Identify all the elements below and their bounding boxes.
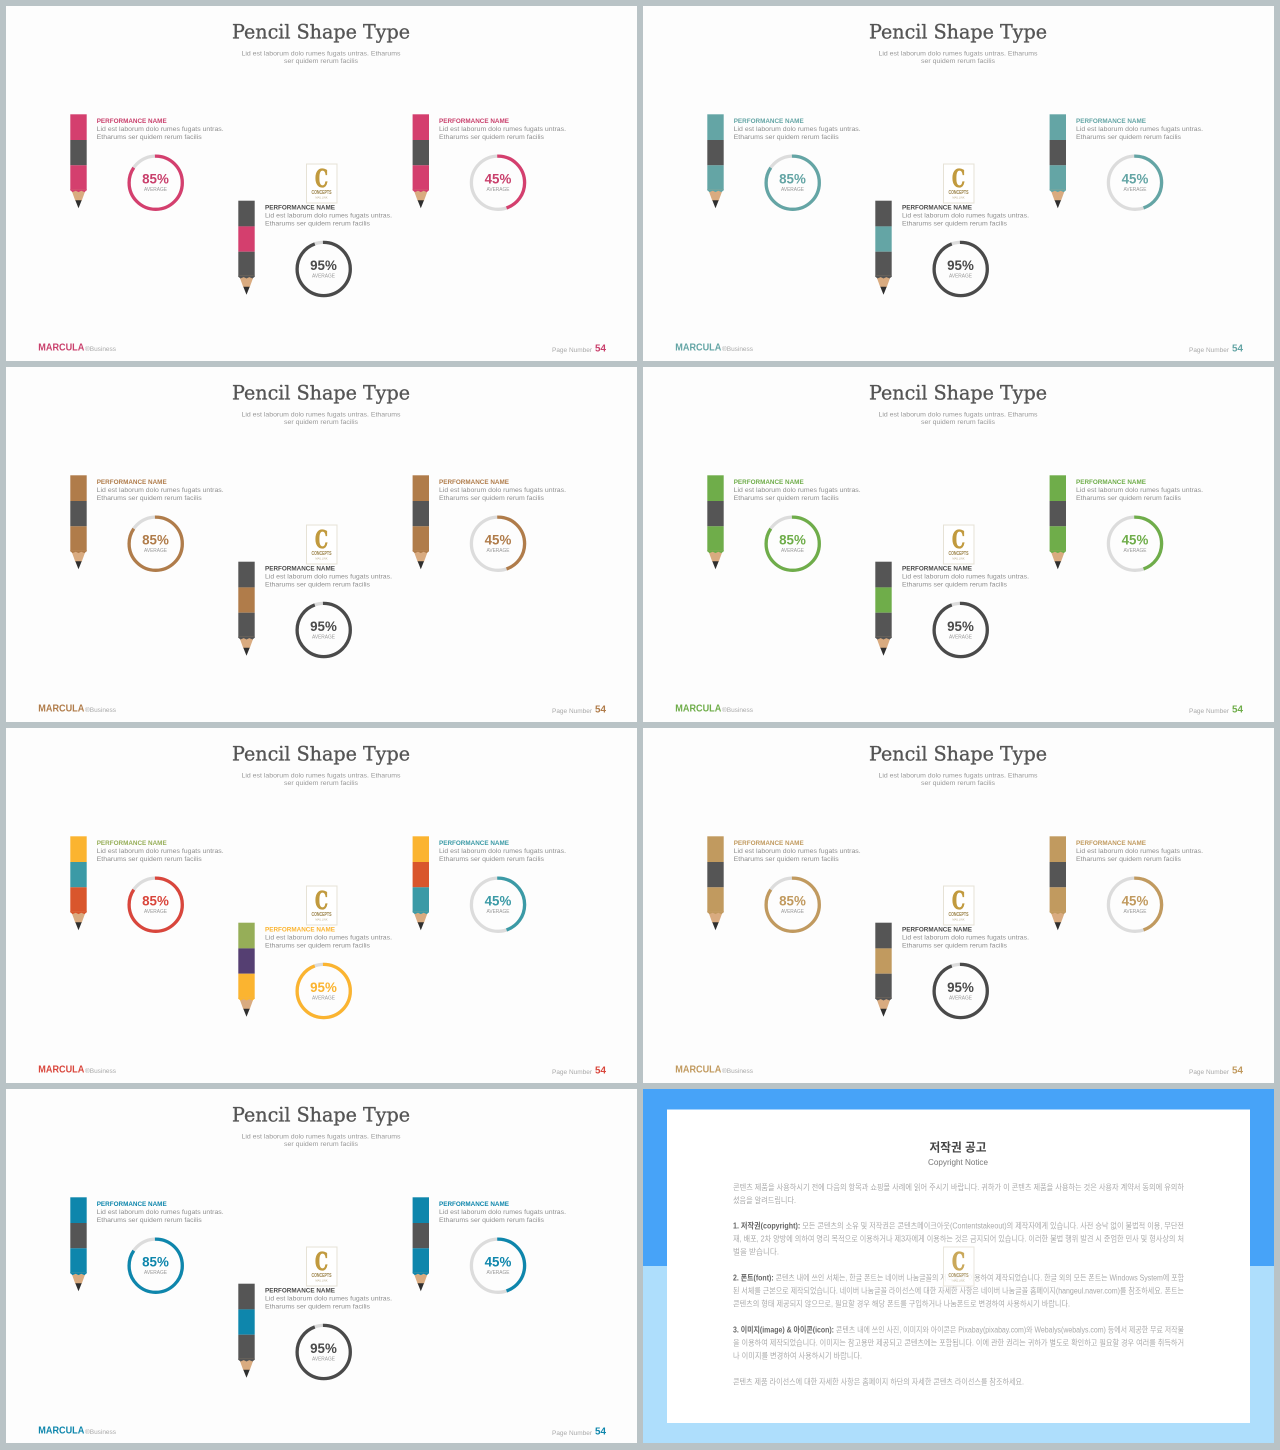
- paragraph 2: font: 2. 폰트(font): 콘텐츠 내에 쓰인 서체는, 한글 폰트는 네이버 나눔글꼴의 저작물을 이용하여 제작되었습니다. 한글 외의 모든 폰트는 Windows System에 포함: [733, 1272, 1185, 1282]
- pencil 1: [70, 114, 87, 208]
- title: Pencil Shape Type: [232, 742, 410, 766]
- slide 3: brown: [6, 367, 637, 722]
- pencil 2: [1050, 836, 1066, 930]
- pencil 2: [413, 1197, 429, 1291]
- text block 2: [439, 1201, 566, 1224]
- text block 3: Lid est laborum dolo rumes fugats untras.: [265, 934, 392, 942]
- text block 1: Lid est laborum dolo rumes fugats untras.: [734, 487, 861, 494]
- subtitle: ser quidem rerum facilis: [284, 419, 359, 426]
- closing line: 콘텐츠 제품 라이선스에 대한 자세한 사항은 홈페이지 하단의 자세한 콘텐츠 라이선스를 참조하세요.: [733, 1376, 1024, 1386]
- text block 2: PERFORMANCE NAME: [1076, 479, 1147, 486]
- text block 3: PERFORMANCE NAME: [902, 204, 973, 212]
- donut 45%: [471, 517, 525, 570]
- subtitle: ser quidem rerum facilis: [284, 780, 359, 787]
- text block 1: [97, 118, 224, 141]
- title: Pencil Shape Type: [869, 380, 1047, 404]
- white panel: [667, 1110, 1250, 1423]
- title: Pencil Shape Type: [232, 1102, 410, 1126]
- text block 3: [902, 566, 1029, 588]
- donut 95%: [934, 603, 987, 657]
- text block 2: Lid est laborum dolo rumes fugats untras.: [439, 487, 566, 494]
- text block 3: Etharums ser quidem rerum facilis: [265, 942, 371, 950]
- footer brand: ®Business: [722, 1067, 754, 1075]
- footer brand: [675, 1064, 754, 1076]
- text block 1: Etharums ser quidem rerum facilis: [97, 495, 202, 502]
- text block 2: PERFORMANCE NAME: [1076, 840, 1147, 847]
- donut 85%: AVERAGE: [144, 1270, 167, 1276]
- text block 1: Lid est laborum dolo rumes fugats untras.: [97, 487, 224, 494]
- subtitle: Lid est laborum dolo rumes fugats untras. Etharums: [242, 50, 401, 57]
- subtitle: ser quidem rerum facilis: [921, 780, 996, 787]
- title: Pencil Shape Type: [232, 380, 410, 404]
- text block 2: PERFORMANCE NAME: [439, 840, 510, 847]
- text block 1: Lid est laborum dolo rumes fugats untras.: [97, 126, 224, 133]
- pencil 3: [875, 562, 892, 656]
- slide 4: green: [643, 367, 1274, 722]
- donut 85%: [129, 1239, 182, 1292]
- donut 85%: AVERAGE: [144, 909, 167, 915]
- text block 1: PERFORMANCE NAME: [97, 118, 167, 125]
- text block 3: Etharums ser quidem rerum facilis: [265, 220, 371, 228]
- paragraph 3: image and icon: [733, 1324, 1184, 1360]
- page number: [1189, 342, 1243, 354]
- subtitle: Lid est laborum dolo rumes fugats untras. Etharums: [242, 411, 401, 418]
- text block 1: [97, 1201, 224, 1224]
- pencil 3: [238, 201, 255, 295]
- page number: 54: [1232, 1064, 1243, 1076]
- text block 1: Lid est laborum dolo rumes fugats untras.: [734, 126, 861, 133]
- text block 1: Etharums ser quidem rerum facilis: [97, 134, 202, 141]
- intro paragraph: [733, 1182, 1185, 1205]
- text block 3: Etharums ser quidem rerum facilis: [902, 220, 1008, 228]
- donut 85%: 85%: [142, 532, 169, 548]
- donut 95%: AVERAGE: [312, 996, 335, 1002]
- donut 95%: AVERAGE: [312, 274, 335, 280]
- donut 45%: 45%: [485, 532, 512, 548]
- text block 2: [1076, 479, 1203, 502]
- text block 2: [439, 840, 566, 863]
- paragraph 2: font: 콘텐츠의 형태 제공되지 않으므로, 필요할 경우 해당 폰트를 구입하거나 나눔폰트로 변경하여 사용하시기 바랍니다.: [733, 1298, 1070, 1308]
- footer brand: [38, 702, 117, 714]
- footer brand: MARCULA: [38, 702, 85, 714]
- pencil 1: [70, 475, 87, 569]
- pencil 2: [413, 475, 429, 569]
- paragraph 3: image and icon: 을 이용하여 제작되었습니다. 이미지는 참고용만 제공되고 콘텐츠에는 포함됩니다. 이에 관한 권리는 귀하가 별도로 확인하고 필요할 경우 여러를 취득하거: [733, 1338, 1184, 1348]
- paragraph 1: copyright: 벌을 받습니다.: [733, 1246, 779, 1256]
- text block 1: Etharums ser quidem rerum facilis: [734, 134, 839, 141]
- pencil 1: [70, 836, 87, 930]
- donut 95%: AVERAGE: [949, 996, 972, 1002]
- donut 85%: 85%: [142, 170, 169, 186]
- donut 95%: 95%: [310, 257, 337, 273]
- logo: [306, 886, 337, 925]
- page number: Page Number: [552, 347, 593, 354]
- text block 3: PERFORMANCE NAME: [265, 926, 336, 934]
- page number: 54: [1232, 342, 1243, 354]
- page number: 54: [595, 704, 606, 716]
- intro paragraph: 콘텐츠 제품을 사용하시기 전에 다음의 항목과 쇼핑몰 사례에 읽어 주시기 바랍니다. 귀하가 이 콘텐츠 제품을 사용하는 것은 사용자 계약서 동의에 유의하: [733, 1182, 1185, 1192]
- subtitle: ser quidem rerum facilis: [284, 58, 359, 65]
- donut 45%: [1108, 517, 1162, 570]
- text block 2: Etharums ser quidem rerum facilis: [439, 1217, 545, 1224]
- subtitle: [242, 411, 401, 426]
- pencil 3: [238, 562, 255, 656]
- paragraph 3: image and icon: 나 이미지를 변경하여 사용하시기 바랍니다.: [733, 1350, 862, 1360]
- page number: 54: [595, 342, 606, 354]
- text block 2: [1076, 840, 1203, 863]
- donut 45%: 45%: [1122, 170, 1149, 186]
- text block 2: Lid est laborum dolo rumes fugats untras.: [439, 848, 566, 855]
- page number: 54: [595, 1064, 606, 1076]
- page number: [552, 704, 606, 716]
- pencil 3: [875, 923, 892, 1017]
- logo: [944, 886, 974, 925]
- page number: [552, 1064, 606, 1076]
- text block 2: Etharums ser quidem rerum facilis: [1076, 495, 1182, 502]
- text block 2: Etharums ser quidem rerum facilis: [439, 856, 545, 863]
- donut 85%: [766, 878, 819, 931]
- footer brand: MARCULA: [38, 1424, 85, 1436]
- donut 45%: AVERAGE: [1124, 187, 1147, 193]
- pencil 2: [413, 836, 429, 930]
- text block 2: Lid est laborum dolo rumes fugats untras.: [439, 126, 566, 133]
- text block 2: Lid est laborum dolo rumes fugats untras.: [1076, 848, 1203, 855]
- donut 45%: [1108, 878, 1162, 931]
- donut 95%: [297, 1325, 350, 1379]
- subtitle: [878, 772, 1038, 787]
- page number: [1189, 704, 1243, 716]
- text block 2: Etharums ser quidem rerum facilis: [439, 495, 545, 502]
- donut 95%: [297, 964, 350, 1018]
- text block 3: Lid est laborum dolo rumes fugats untras.: [265, 212, 392, 220]
- footer brand: MARCULA: [675, 1064, 722, 1076]
- page number: 54: [1232, 704, 1243, 716]
- text block 3: Etharums ser quidem rerum facilis: [265, 582, 371, 588]
- text block 3: Etharums ser quidem rerum facilis: [902, 582, 1008, 588]
- logo: [944, 1247, 974, 1286]
- donut 45%: 45%: [485, 1254, 512, 1270]
- text block 3: Lid est laborum dolo rumes fugats untras.: [265, 574, 392, 580]
- page number: [552, 342, 606, 354]
- text block 1: Lid est laborum dolo rumes fugats untras.: [97, 848, 224, 855]
- paragraph 3: image and icon: 3. 이미지(image) & 아이콘(icon): 콘텐츠 내에 쓰인 사진, 이미지와 아이콘은 Pixabay(pixabay.com)와 Webalys(webalys.com) 등에서 제공한 무료 저작물: [733, 1324, 1184, 1334]
- logo: [944, 525, 974, 564]
- paragraph 2: font: [733, 1272, 1185, 1308]
- pencil 2: [413, 114, 429, 208]
- donut 85%: [129, 878, 182, 931]
- donut 85%: 85%: [779, 170, 806, 186]
- pencil 1: [70, 1197, 87, 1291]
- donut 85%: [766, 517, 819, 570]
- donut 45%: AVERAGE: [486, 548, 510, 554]
- text block 3: Lid est laborum dolo rumes fugats untras.: [902, 574, 1029, 580]
- text block 3: PERFORMANCE NAME: [265, 1288, 336, 1294]
- footer brand: ®Business: [85, 1428, 117, 1436]
- subtitle: Lid est laborum dolo rumes fugats untras. Etharums: [878, 411, 1038, 418]
- donut 85%: AVERAGE: [781, 909, 804, 915]
- donut 95%: [297, 242, 350, 296]
- notice subtitle: Copyright Notice: [928, 1158, 989, 1167]
- footer brand: MARCULA: [675, 702, 722, 714]
- donut 95%: [297, 603, 350, 657]
- donut 85%: [766, 156, 819, 209]
- footer brand: MARCULA: [38, 342, 85, 354]
- pencil 1: [707, 836, 724, 930]
- donut 95%: 95%: [310, 618, 337, 634]
- subtitle: Lid est laborum dolo rumes fugats untras. Etharums: [878, 50, 1038, 57]
- subtitle: Lid est laborum dolo rumes fugats untras. Etharums: [878, 772, 1038, 779]
- page number: [552, 1426, 606, 1438]
- notice title: 저작권 공고: [930, 1140, 986, 1154]
- donut 95%: AVERAGE: [312, 1356, 335, 1362]
- text block 3: PERFORMANCE NAME: [265, 204, 336, 212]
- donut 95%: [934, 242, 987, 296]
- text block 1: Lid est laborum dolo rumes fugats untras.: [97, 1209, 224, 1216]
- donut 95%: 95%: [947, 257, 974, 273]
- page number: Page Number: [552, 1430, 593, 1437]
- text block 1: [734, 479, 861, 502]
- text block 1: [97, 479, 224, 502]
- footer brand: ®Business: [722, 345, 754, 353]
- text block 1: [734, 840, 861, 863]
- text block 2: Lid est laborum dolo rumes fugats untras.: [1076, 126, 1203, 133]
- slide 7: blue: [6, 1089, 637, 1443]
- paragraph 1: copyright: 재, 배포, 2차 양방에 의하여 영리 목적으로 이용하거나 제3자에게 이용하는 것은 금지되어 있습니다. 이러한 불법 행위 발견 시 준엄한 민사 및 형사상의 처: [733, 1234, 1184, 1244]
- donut 85%: [129, 156, 182, 209]
- footer brand: ®Business: [85, 706, 117, 714]
- pencil 1: [707, 475, 724, 569]
- slide 6: tan: [643, 728, 1274, 1083]
- text block 2: PERFORMANCE NAME: [439, 118, 510, 125]
- donut 95%: AVERAGE: [949, 634, 972, 640]
- page number: [1189, 1064, 1243, 1076]
- donut 45%: 45%: [485, 892, 512, 908]
- text block 2: PERFORMANCE NAME: [439, 1201, 510, 1208]
- text block 2: Etharums ser quidem rerum facilis: [1076, 134, 1182, 141]
- page number: Page Number: [1189, 1069, 1230, 1076]
- donut 45%: [471, 1239, 525, 1292]
- text block 3: [902, 926, 1029, 950]
- text block 3: PERFORMANCE NAME: [902, 566, 973, 572]
- footer brand: [38, 1064, 117, 1076]
- donut 45%: [471, 878, 525, 931]
- donut 85%: 85%: [779, 892, 806, 908]
- pencil 2: [1050, 114, 1066, 208]
- subtitle: [878, 50, 1038, 65]
- donut 85%: 85%: [779, 532, 806, 548]
- footer brand: MARCULA: [675, 342, 722, 354]
- page number: 54: [595, 1426, 606, 1438]
- logo: [944, 164, 974, 203]
- title: Pencil Shape Type: [869, 20, 1047, 44]
- donut 45%: 45%: [1122, 532, 1149, 548]
- text block 3: [265, 566, 392, 588]
- footer brand: [675, 342, 754, 354]
- text block 2: [439, 479, 566, 502]
- text block 1: PERFORMANCE NAME: [734, 840, 804, 847]
- text block 3: Lid est laborum dolo rumes fugats untras.: [902, 934, 1029, 942]
- text block 2: Lid est laborum dolo rumes fugats untras.: [1076, 487, 1203, 494]
- text block 3: [265, 204, 392, 228]
- text block 3: [265, 1288, 392, 1310]
- text block 3: PERFORMANCE NAME: [265, 566, 336, 572]
- text block 1: Etharums ser quidem rerum facilis: [97, 1217, 202, 1224]
- text block 2: PERFORMANCE NAME: [439, 479, 510, 486]
- logo: [306, 525, 337, 564]
- subtitle: [242, 772, 401, 787]
- text block 1: PERFORMANCE NAME: [97, 479, 167, 486]
- slide 1: pink: [6, 6, 637, 361]
- text block 3: Etharums ser quidem rerum facilis: [902, 942, 1008, 950]
- subtitle: Lid est laborum dolo rumes fugats untras. Etharums: [242, 772, 401, 779]
- subtitle: [878, 411, 1038, 426]
- text block 2: Lid est laborum dolo rumes fugats untras.: [439, 1209, 566, 1216]
- page number: Page Number: [1189, 347, 1230, 354]
- donut 95%: 95%: [947, 618, 974, 634]
- text block 1: PERFORMANCE NAME: [97, 1201, 167, 1208]
- donut 95%: AVERAGE: [312, 634, 335, 640]
- text block 2: Etharums ser quidem rerum facilis: [439, 134, 545, 141]
- subtitle: Lid est laborum dolo rumes fugats untras. Etharums: [242, 1133, 401, 1140]
- slide 5: multicolour: [6, 728, 637, 1083]
- footer brand: [38, 1424, 117, 1436]
- subtitle: ser quidem rerum facilis: [284, 1141, 359, 1148]
- donut 85%: AVERAGE: [781, 548, 804, 554]
- subtitle: [242, 50, 401, 65]
- footer brand: ®Business: [85, 345, 117, 353]
- donut 45%: AVERAGE: [1124, 909, 1147, 915]
- text block 3: PERFORMANCE NAME: [902, 926, 973, 934]
- footer brand: ®Business: [722, 706, 754, 714]
- text block 1: [734, 118, 861, 141]
- footer brand: [675, 702, 754, 714]
- pencil 3: [875, 201, 892, 295]
- subtitle: ser quidem rerum facilis: [921, 58, 996, 65]
- title: Pencil Shape Type: [232, 20, 410, 44]
- text block 1: Etharums ser quidem rerum facilis: [734, 495, 839, 502]
- text block 3: [265, 926, 392, 950]
- text block 3: Etharums ser quidem rerum facilis: [265, 1304, 371, 1310]
- donut 95%: [934, 964, 987, 1018]
- footer brand: MARCULA: [38, 1064, 85, 1076]
- text block 1: PERFORMANCE NAME: [734, 479, 804, 486]
- slide 2: teal: [643, 6, 1274, 361]
- donut 45%: [1108, 156, 1162, 209]
- subtitle: ser quidem rerum facilis: [921, 419, 996, 426]
- intro paragraph: 셨음을 알려드립니다.: [733, 1195, 796, 1205]
- text block 2: Etharums ser quidem rerum facilis: [1076, 856, 1182, 863]
- donut 45%: AVERAGE: [486, 187, 510, 193]
- donut 45%: [471, 156, 525, 209]
- text block 1: Lid est laborum dolo rumes fugats untras.: [734, 848, 861, 855]
- logo: [306, 164, 337, 203]
- paragraph 1: copyright: [733, 1220, 1184, 1256]
- donut 95%: 95%: [310, 1340, 337, 1356]
- pencil 3: [238, 1284, 255, 1378]
- text block 1: Etharums ser quidem rerum facilis: [734, 856, 839, 863]
- footer brand: [38, 342, 117, 354]
- page number: Page Number: [552, 1069, 593, 1076]
- footer brand: ®Business: [85, 1067, 117, 1075]
- donut 45%: AVERAGE: [486, 1270, 510, 1276]
- text block 1: PERFORMANCE NAME: [734, 118, 804, 125]
- pencil 1: [707, 114, 724, 208]
- donut 85%: AVERAGE: [144, 187, 167, 193]
- text block 1: [97, 840, 224, 863]
- donut 85%: 85%: [142, 892, 169, 908]
- text block 3: [902, 204, 1029, 228]
- donut 45%: AVERAGE: [1124, 548, 1147, 554]
- text block 3: Lid est laborum dolo rumes fugats untras.: [902, 212, 1029, 220]
- pencil 3: [238, 923, 255, 1017]
- subtitle: [242, 1133, 401, 1148]
- paragraph 1: copyright: 1. 저작권(copyright): 모든 콘텐츠의 소유 및 저작권은 콘텐츠메이크아웃(Contentstakeout)의 제작자에게 있습니다. 사전 승낙 없이 불법적 이용, 무단전: [733, 1220, 1184, 1230]
- donut 45%: 45%: [1122, 892, 1149, 908]
- donut 85%: [129, 517, 182, 570]
- page number: Page Number: [1189, 708, 1230, 715]
- text block 1: Etharums ser quidem rerum facilis: [97, 856, 202, 863]
- text block 2: [439, 118, 566, 141]
- logo: [306, 1247, 337, 1286]
- donut 45%: AVERAGE: [486, 909, 510, 915]
- donut 95%: 95%: [310, 979, 337, 995]
- slide 8: copyright notice: [643, 1089, 1274, 1443]
- title: Pencil Shape Type: [869, 742, 1047, 766]
- donut 85%: AVERAGE: [144, 548, 167, 554]
- pencil 2: [1050, 475, 1066, 569]
- donut 85%: AVERAGE: [781, 187, 804, 193]
- text block 1: PERFORMANCE NAME: [97, 840, 167, 847]
- page number: Page Number: [552, 708, 593, 715]
- donut 95%: 95%: [947, 979, 974, 995]
- text block 2: PERFORMANCE NAME: [1076, 118, 1147, 125]
- donut 85%: 85%: [142, 1254, 169, 1270]
- paragraph 2: font: 된 서체를 근본으로 제작되었습니다. 네이버 나눔글꼴 라이선스에 대한 자세한 사항은 네이버 나눔글꼴 홈페이지(hangeul.naver.com)를 참조하세요. 폰트는: [733, 1286, 1184, 1296]
- donut 95%: AVERAGE: [949, 274, 972, 280]
- donut 45%: 45%: [485, 170, 512, 186]
- text block 2: [1076, 118, 1203, 141]
- text block 3: Lid est laborum dolo rumes fugats untras.: [265, 1296, 392, 1302]
